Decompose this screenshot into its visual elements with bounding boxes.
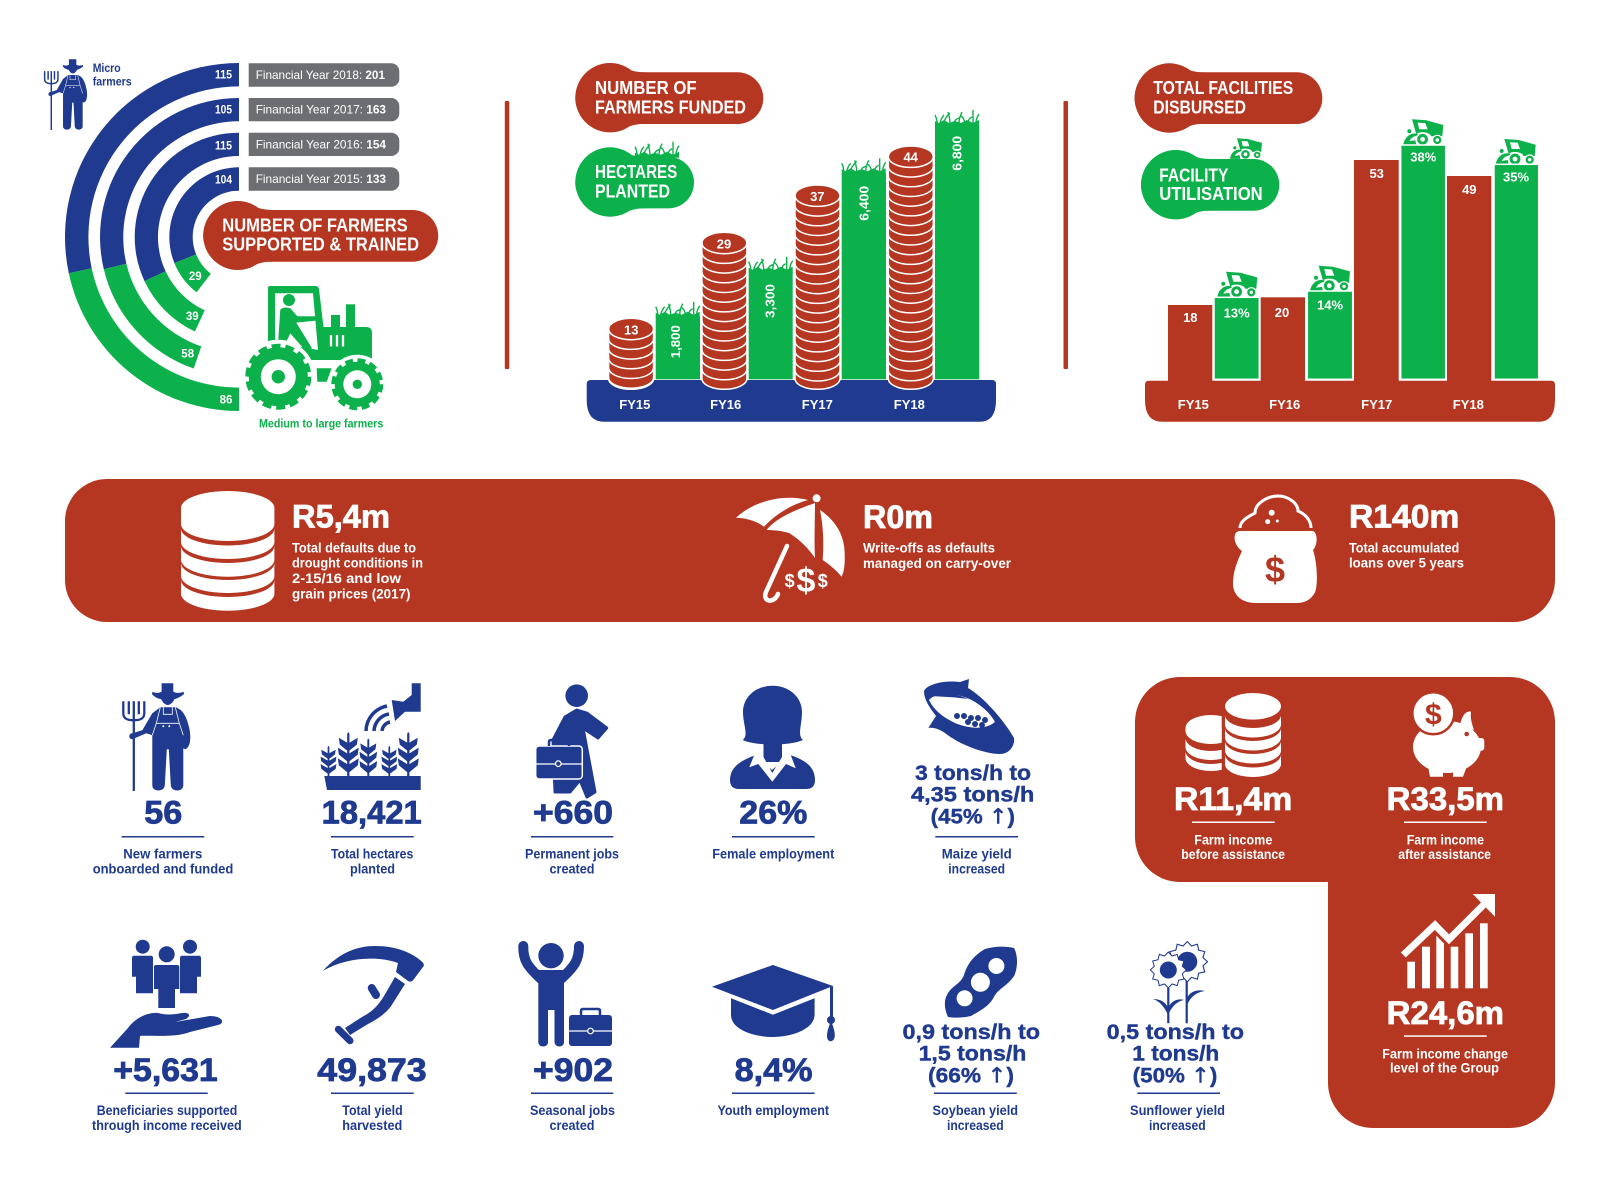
base band: financial years bbox=[587, 380, 996, 422]
label: micro farmers: Micro bbox=[93, 61, 121, 75]
stat: permanent jobs created: +660 bbox=[533, 794, 613, 830]
chart: concentric half rings of micro and medium farmers: 86 bbox=[220, 394, 232, 406]
icon: money bag: $ bbox=[1265, 549, 1285, 590]
stat: soybean yield: Soybean yield bbox=[932, 1102, 1018, 1118]
stat: female employment: 26% bbox=[739, 794, 807, 830]
stat: beneficiaries supported: +5,631 bbox=[113, 1052, 218, 1088]
coin stack: farmers FY15: 13 bbox=[624, 322, 639, 337]
stat: soybean yield: (66% ↑) bbox=[928, 1063, 1014, 1087]
bar: utilisation FY17: 38% bbox=[1410, 150, 1437, 165]
icon: umbrella with dollar signs: $ bbox=[797, 562, 816, 600]
bar: utilisation FY18: 35% bbox=[1503, 170, 1529, 185]
heading: hectares planted bbox=[575, 142, 694, 217]
legend: financial year totals bbox=[249, 63, 399, 191]
icon: walking person with briefcase bbox=[536, 684, 607, 797]
stat: youth employment bbox=[712, 965, 835, 1118]
divider: left bbox=[505, 101, 509, 369]
heading: total facilities disbursed: DISBURSED bbox=[1153, 98, 1246, 118]
divider: right bbox=[1064, 101, 1068, 369]
coin stack: farmers FY17: 37 bbox=[810, 189, 825, 204]
heading: number of farmers funded: NUMBER OF bbox=[595, 78, 697, 98]
legend: financial year totals: Financial Year 2016: 154 bbox=[256, 138, 386, 152]
heading: number of farmers supported and trained: NUMBER OF FARMERS bbox=[222, 216, 408, 236]
stat: maize yield: increased bbox=[948, 861, 1005, 877]
stat: soybean yield: 0,9 tons/h to bbox=[902, 1021, 1040, 1044]
icon: maize cob bbox=[924, 679, 1014, 754]
bar: utilisation FY15 bbox=[1214, 272, 1259, 379]
base band: financial years: FY17 bbox=[1361, 397, 1392, 412]
stat: sunflower yield: Sunflower yield bbox=[1130, 1102, 1225, 1118]
heading: number of farmers supported and trained: SUPPORTED & TRAINED bbox=[222, 235, 419, 255]
stat: R5,4m defaults: Total defaults due to bbox=[292, 540, 416, 555]
stat: R140m loans: R140m bbox=[1349, 498, 1459, 534]
bar: utilisation FY16: 14% bbox=[1317, 297, 1343, 312]
heading: hectares planted: HECTARES bbox=[595, 162, 677, 182]
stat: farm income change: level of the Group bbox=[1390, 1060, 1499, 1076]
stat: seasonal jobs created: Seasonal jobs bbox=[530, 1102, 615, 1118]
bar: facilities FY16: 20 bbox=[1275, 305, 1289, 320]
icon: piggy bank with coin: $ bbox=[1425, 698, 1442, 732]
stat: permanent jobs created: created bbox=[550, 861, 594, 877]
stat: new farmers: onboarded and funded bbox=[93, 861, 233, 877]
stat: R5,4m defaults bbox=[292, 498, 423, 601]
base band: financial years: FY16 bbox=[710, 397, 741, 412]
icon: farmer bbox=[123, 683, 190, 791]
stat: soybean yield bbox=[902, 947, 1040, 1133]
base band: financial years: FY16 bbox=[1269, 397, 1300, 412]
chart: concentric half rings of micro and medium farmers: 105 bbox=[215, 105, 233, 117]
stat: farm income after assistance: R33,5m bbox=[1387, 781, 1504, 817]
stat: farm income before assistance: R11,4m bbox=[1174, 781, 1292, 817]
stat: maize yield: 4,35 tons/h bbox=[911, 784, 1034, 807]
bar: hectares FY17: 6,400 bbox=[856, 186, 871, 221]
stat: youth employment: 8,4% bbox=[735, 1052, 813, 1088]
heading: facility utilisation: FACILITY bbox=[1159, 165, 1228, 185]
base band: financial years: FY15 bbox=[619, 397, 650, 412]
panel: farmers funded and hectares planted bbox=[575, 63, 996, 422]
stat: farm income after assistance: Farm income bbox=[1407, 831, 1484, 847]
panel: facilities disbursed and utilisation bbox=[1135, 63, 1555, 422]
stat: youth employment: Youth employment bbox=[718, 1102, 829, 1118]
stat: new farmers: 56 bbox=[144, 794, 182, 830]
stat: sunflower yield bbox=[1107, 942, 1244, 1133]
icon: umbrella with dollar signs: $ bbox=[785, 571, 795, 591]
chart: concentric half rings of micro and medium farmers: 115 bbox=[215, 70, 233, 82]
stat: seasonal jobs created bbox=[523, 943, 615, 1133]
bar: utilisation FY15: 13% bbox=[1224, 305, 1250, 320]
bar: hectares FY15: 1,800 bbox=[668, 325, 683, 358]
icon: sunflowers bbox=[1150, 942, 1207, 1023]
stat: maize yield: 3 tons/h to bbox=[915, 762, 1031, 785]
icon: umbrella with dollar signs: $ bbox=[818, 571, 828, 591]
label: micro farmers bbox=[93, 61, 132, 89]
panel: defaults and loans banner bbox=[65, 479, 1555, 622]
stat: sunflower yield: 1 tons/h bbox=[1132, 1043, 1219, 1066]
icon: micro farmer bbox=[45, 59, 87, 130]
stat: maize yield: (45% ↑) bbox=[931, 804, 1015, 828]
stat: new farmers: New farmers bbox=[123, 845, 202, 861]
label: micro farmers: farmers bbox=[93, 75, 132, 89]
icon: graduation cap bbox=[712, 965, 835, 1041]
panel: number of farmers supported and trained bbox=[45, 59, 438, 431]
bar: facilities FY18 bbox=[1447, 176, 1491, 382]
stat: R140m loans bbox=[1349, 498, 1464, 571]
bar: facilities FY17 bbox=[1354, 160, 1399, 382]
stat: total hectares planted bbox=[321, 683, 422, 877]
stat: farm income change bbox=[1382, 995, 1508, 1076]
icon: money bag bbox=[1233, 496, 1317, 603]
base band: financial years: FY18 bbox=[1453, 397, 1484, 412]
icon: soybean pod bbox=[945, 947, 1017, 1018]
heading: number of farmers funded: FARMERS FUNDED bbox=[595, 98, 746, 118]
icon: stacked disc cylinder bbox=[181, 491, 274, 611]
coin stack: farmers FY16 bbox=[701, 233, 748, 390]
base band: financial years: FY15 bbox=[1178, 397, 1209, 412]
bar: hectares FY18: 6,800 bbox=[950, 136, 965, 171]
stat: R140m loans: Total accumulated bbox=[1349, 541, 1459, 556]
coin stack: farmers FY18: 44 bbox=[903, 149, 919, 164]
label: medium to large farmers: Medium to large farmers bbox=[259, 417, 384, 431]
stat: permanent jobs created bbox=[525, 684, 619, 877]
stat: total hectares planted: planted bbox=[350, 861, 395, 877]
chart: concentric half rings of micro and medium farmers: 58 bbox=[181, 348, 195, 360]
icon: woman bbox=[730, 686, 815, 789]
stat: farm income change: R24,6m bbox=[1387, 995, 1504, 1031]
panel: farm income bbox=[1135, 677, 1555, 1128]
stat: sunflower yield: 0,5 tons/h to bbox=[1107, 1021, 1244, 1044]
stat: soybean yield: 1,5 tons/h bbox=[919, 1043, 1026, 1066]
stat: farm income before assistance bbox=[1174, 781, 1292, 862]
heading: total facilities disbursed bbox=[1135, 63, 1322, 133]
icon: rising bar chart with arrow bbox=[1403, 894, 1495, 988]
icon: person with raised arms and briefcase bbox=[523, 943, 612, 1046]
legend: financial year totals: Financial Year 2015: 133 bbox=[256, 172, 386, 186]
icon: scythe bbox=[323, 946, 424, 1041]
stat: new farmers bbox=[93, 683, 233, 877]
bar: hectares FY17 bbox=[842, 158, 886, 379]
stat: total yield harvested: Total yield bbox=[342, 1102, 403, 1118]
chart: concentric half rings of micro and medium farmers bbox=[65, 63, 239, 411]
stat: total hectares planted: Total hectares bbox=[331, 845, 413, 861]
coin stack: farmers FY18 bbox=[888, 146, 933, 389]
stat: R5,4m defaults: R5,4m bbox=[292, 498, 390, 534]
icon: coin stacks bbox=[1186, 693, 1281, 777]
bar: hectares FY16 bbox=[749, 257, 793, 379]
bar: utilisation FY17 bbox=[1401, 119, 1446, 379]
base band: financial years: FY18 bbox=[894, 397, 925, 412]
icon: watering can over crops bbox=[321, 683, 421, 790]
stat: R5,4m defaults: grain prices (2017) bbox=[292, 586, 410, 601]
stat: R5,4m defaults: drought conditions in bbox=[292, 556, 423, 571]
stat: sunflower yield: (50% ↑) bbox=[1133, 1063, 1217, 1087]
bar: utilisation FY18 bbox=[1494, 139, 1539, 379]
bar: facilities FY15 bbox=[1168, 305, 1212, 382]
bar: utilisation FY16 bbox=[1307, 266, 1353, 379]
stat: permanent jobs created: Permanent jobs bbox=[525, 845, 619, 861]
stat: farm income after assistance bbox=[1387, 781, 1504, 862]
stat: total yield harvested: harvested bbox=[342, 1117, 402, 1133]
coin stack: farmers FY16: 29 bbox=[717, 236, 731, 251]
base band: financial years bbox=[1145, 381, 1555, 422]
bar: facilities FY17: 53 bbox=[1369, 166, 1384, 181]
chart: concentric half rings of micro and medium farmers: 104 bbox=[215, 175, 233, 187]
stat: female employment: Female employment bbox=[712, 845, 835, 861]
bar: hectares FY15 bbox=[656, 302, 700, 379]
stat: soybean yield: increased bbox=[947, 1117, 1004, 1133]
icon: umbrella with dollar signs bbox=[736, 494, 845, 601]
bar: hectares FY18 bbox=[935, 110, 979, 379]
stat: farm income change: Farm income change bbox=[1382, 1045, 1508, 1061]
bar: facilities FY18: 49 bbox=[1462, 182, 1477, 197]
chart: concentric half rings of micro and medium farmers: 29 bbox=[189, 271, 202, 283]
coin stack: farmers FY17 bbox=[794, 186, 840, 390]
stat: total yield harvested: 49,873 bbox=[317, 1052, 427, 1088]
stat: farm income before assistance: before assistance bbox=[1181, 846, 1285, 862]
icon: tractor bbox=[241, 286, 387, 414]
heading: number of farmers funded bbox=[575, 63, 763, 132]
legend: financial year totals: Financial Year 2017: 163 bbox=[256, 102, 386, 116]
stat: R0m write-offs: Write-offs as defaults bbox=[863, 541, 995, 556]
stat: R0m write-offs: managed on carry-over bbox=[863, 556, 1012, 571]
icon: people above open hand bbox=[110, 940, 222, 1048]
stat: R0m write-offs bbox=[863, 499, 1012, 571]
stat: beneficiaries supported bbox=[92, 940, 242, 1133]
legend: financial year totals: Financial Year 2018: 201 bbox=[256, 68, 385, 82]
stat: maize yield: Maize yield bbox=[942, 845, 1012, 861]
heading: hectares planted: PLANTED bbox=[595, 182, 670, 202]
stat: seasonal jobs created: created bbox=[550, 1117, 594, 1133]
heading: total facilities disbursed: TOTAL FACILITIES bbox=[1153, 78, 1293, 98]
bar: facilities FY16 bbox=[1261, 297, 1305, 382]
heading: facility utilisation: UTILISATION bbox=[1159, 184, 1263, 204]
bar: hectares FY16: 3,300 bbox=[762, 284, 777, 318]
icon: piggy bank with coin bbox=[1412, 692, 1484, 777]
chart: concentric half rings of micro and medium farmers: 115 bbox=[215, 141, 233, 153]
stat: total yield harvested bbox=[317, 946, 427, 1133]
stat: farm income before assistance: Farm income bbox=[1194, 831, 1272, 847]
stat: female employment bbox=[712, 686, 835, 861]
stat: beneficiaries supported: through income received bbox=[92, 1117, 242, 1133]
stat: total hectares planted: 18,421 bbox=[322, 794, 422, 830]
stat: R0m write-offs: R0m bbox=[863, 499, 933, 535]
heading: facility utilisation bbox=[1141, 138, 1279, 219]
chart: concentric half rings of micro and medium farmers: 39 bbox=[186, 311, 199, 323]
stat: maize yield bbox=[911, 679, 1034, 877]
stat: farm income after assistance: after assistance bbox=[1398, 846, 1491, 862]
stat: beneficiaries supported: Beneficiaries supported bbox=[97, 1102, 237, 1118]
base band: financial years: FY17 bbox=[802, 397, 833, 412]
coin stack: farmers FY15 bbox=[608, 319, 654, 390]
stat: sunflower yield: increased bbox=[1149, 1117, 1206, 1133]
stat: R140m loans: loans over 5 years bbox=[1349, 556, 1464, 571]
bar: facilities FY15: 18 bbox=[1183, 310, 1198, 325]
stat: R5,4m defaults: 2-15/16 and low bbox=[292, 571, 402, 586]
heading: number of farmers supported and trained bbox=[203, 201, 438, 270]
stat: seasonal jobs created: +902 bbox=[533, 1052, 613, 1088]
